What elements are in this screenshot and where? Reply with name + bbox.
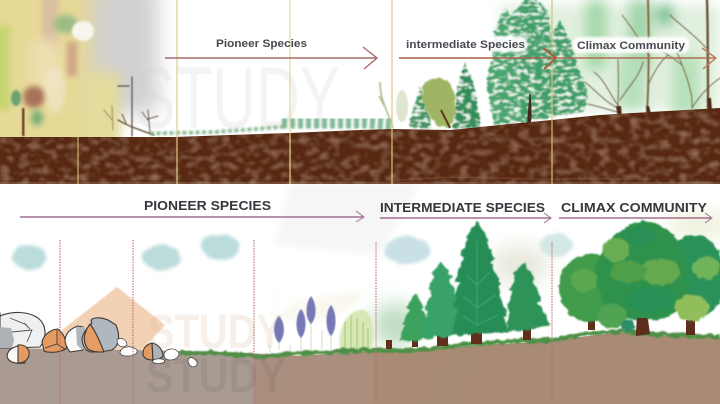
watermark: lower text: STUDY xyxy=(148,306,283,359)
panel: bottom succession scene xyxy=(0,184,720,404)
foliage clusters xyxy=(559,221,720,332)
small conifer xyxy=(399,293,435,341)
heading: pioneer species, top: Pioneer Species xyxy=(216,38,307,50)
conifers: bottom xyxy=(386,222,551,349)
medium conifer xyxy=(422,262,465,337)
right conifer xyxy=(506,263,551,332)
main trunk over foliage xyxy=(636,318,650,336)
roots xyxy=(430,350,465,404)
grass tuft xyxy=(340,310,373,350)
intermediate conifers: top xyxy=(409,0,588,128)
watermark: top: STUDY xyxy=(135,48,340,147)
heading: climax community, bottom: CLIMAX COMMUNITY xyxy=(561,200,707,215)
stage dividers: top xyxy=(78,0,552,184)
soil: bottom xyxy=(0,332,720,404)
soil: top xyxy=(0,108,720,184)
conifer trunks xyxy=(386,328,531,349)
bare deciduous trees: climax xyxy=(585,0,720,118)
label backings: intermediate and climax xyxy=(491,34,690,54)
rocks xyxy=(0,312,197,367)
watermark: lower text xyxy=(148,314,285,392)
heading: pioneer species, bottom: PIONEER SPECIES xyxy=(144,198,271,213)
heading: intermediate species, top: intermediate Species xyxy=(406,39,525,51)
tall speckled conifers xyxy=(486,0,588,125)
arrow: climax community, top xyxy=(556,48,716,69)
bare shrubs at the edge of the intermediate zone xyxy=(379,82,408,128)
heading: climax community, top: Climax Community xyxy=(577,40,685,52)
watermark: mountain xyxy=(60,287,165,352)
painted hazy background: left xyxy=(0,0,158,151)
soil: bare rock zone xyxy=(0,348,255,404)
panel: top succession scene xyxy=(0,0,720,184)
heading: intermediate species, bottom: INTERMEDIATE SPECIES xyxy=(380,200,545,215)
dead branches xyxy=(104,77,158,136)
grass line xyxy=(180,331,720,357)
tall conifer brush strokes xyxy=(463,240,498,325)
arrow: intermediate species, bottom xyxy=(380,213,551,223)
arrow: pioneer species, top xyxy=(165,47,377,69)
light green forest haze xyxy=(500,0,720,115)
arrow: climax community, bottom xyxy=(559,213,712,223)
tall conifer xyxy=(452,222,509,335)
pioneer seedlings xyxy=(150,122,392,134)
arrow: pioneer species, bottom xyxy=(20,211,364,222)
haze behind the forest xyxy=(373,215,720,347)
climax trees: bottom xyxy=(559,221,720,336)
watermark: graduation cap xyxy=(281,188,412,250)
watermark: lower text: STUDY xyxy=(146,350,286,403)
climax trunks xyxy=(588,312,695,336)
soil texture xyxy=(0,177,720,183)
lavender plants xyxy=(270,296,373,352)
stage dividers: bottom xyxy=(60,240,552,404)
clouds xyxy=(12,233,572,271)
arrow: intermediate species, top xyxy=(399,48,556,69)
